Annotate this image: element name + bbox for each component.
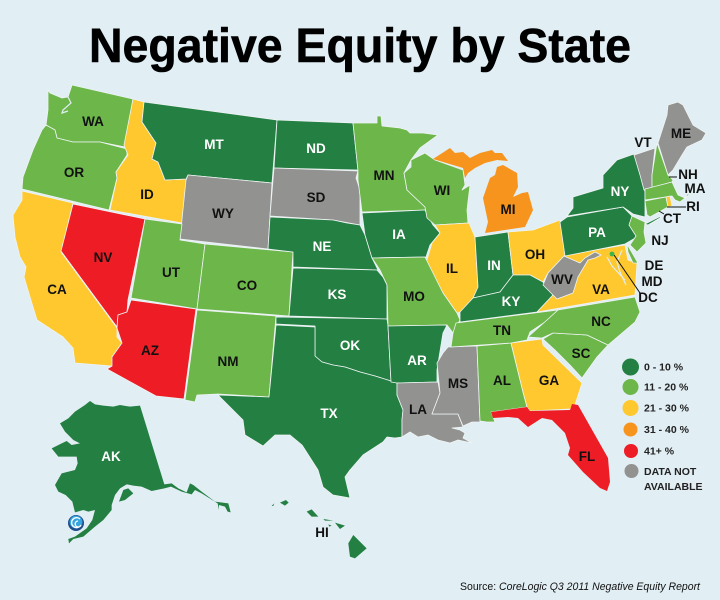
state: CA [13, 191, 122, 366]
state: MO [372, 257, 460, 333]
source note: Source: CoreLogic Q3 2011 Negative Equity Report [460, 581, 701, 593]
state labels: AL [493, 373, 511, 388]
state labels: CO [237, 278, 257, 293]
state: NM [185, 310, 276, 402]
state labels: WY [212, 206, 234, 221]
state labels: PA [588, 225, 606, 240]
state: WV [543, 252, 601, 299]
state labels: WA [82, 114, 104, 129]
state: NE [268, 217, 378, 270]
DC marker [610, 252, 614, 256]
state labels: IA [392, 227, 406, 242]
state labels: IL [446, 261, 458, 276]
title: Negative Equity by State [89, 20, 631, 73]
state: ND [274, 120, 358, 170]
state: TX [218, 325, 403, 498]
state: NH [652, 143, 673, 188]
state labels: CA [47, 282, 67, 297]
state: AK [52, 401, 231, 543]
state: IL [426, 223, 478, 313]
state labels: RI [686, 199, 700, 214]
state: MA [645, 182, 689, 202]
legend: 31-40: 31 - 40 % [644, 424, 690, 436]
state labels: CT [663, 211, 682, 226]
state labels: AR [407, 353, 427, 368]
state labels: DE [645, 258, 663, 273]
legend: 41+: 41+ % [644, 446, 675, 458]
state: NY [567, 154, 661, 225]
state: KS [289, 268, 387, 319]
state: FL [491, 404, 610, 491]
state: UT [131, 219, 205, 309]
state: CT [645, 197, 668, 217]
state labels: SC [572, 346, 591, 361]
state: OK [276, 317, 391, 381]
state: LA [397, 382, 472, 443]
state labels: NY [611, 184, 629, 199]
state labels: NJ [651, 233, 669, 248]
state labels: NM [218, 354, 238, 369]
state labels: NC [591, 314, 611, 329]
state: NJ [629, 216, 646, 252]
state: WA [46, 85, 133, 147]
state: MI [433, 148, 533, 233]
state labels: TN [493, 323, 511, 338]
state: OH [508, 220, 565, 282]
state labels: OR [64, 165, 84, 180]
state labels: LA [409, 402, 427, 417]
state: ID [110, 99, 187, 223]
state labels: NH [678, 167, 698, 182]
state labels: MI [500, 202, 516, 217]
state labels: MA [684, 181, 706, 196]
legend: data not available: DATA NOT [644, 466, 697, 478]
state: PA [560, 207, 637, 256]
state: SD [270, 168, 360, 225]
state: MT [142, 102, 277, 183]
state labels: ME [671, 126, 691, 141]
state labels: DC [638, 290, 658, 305]
state: VA and MD [537, 245, 637, 312]
state labels: ID [140, 187, 154, 202]
legend: 11-20: 11 - 20 % [644, 382, 689, 394]
state: WI [404, 153, 470, 225]
state labels: KY [502, 294, 520, 309]
state: VT [634, 148, 655, 190]
state: HI [272, 500, 367, 558]
state labels: AZ [141, 343, 159, 358]
state: SC [543, 333, 608, 378]
map of US states [13, 85, 706, 558]
legend: data not available: AVAILABLE [644, 481, 703, 493]
state: DE [627, 244, 638, 263]
state: CO [197, 244, 293, 316]
state labels: MN [374, 168, 394, 183]
state: NC [528, 297, 640, 345]
legend: 21-30: 21 - 30 % [644, 402, 690, 414]
state labels: NE [313, 239, 331, 254]
state labels: AK [101, 449, 121, 464]
state labels: MT [204, 137, 224, 152]
water inlets: Puget Sound and Chesapeake Bay [62, 97, 626, 285]
legend [622, 358, 703, 493]
legend: data not available [624, 464, 703, 493]
state: NV [61, 204, 145, 327]
state labels: KS [328, 287, 346, 302]
state labels: WI [434, 183, 450, 198]
state labels: UT [162, 265, 181, 280]
state labels: OH [525, 247, 545, 262]
state labels: FL [579, 449, 595, 464]
state: RI [666, 196, 672, 207]
state labels: TX [320, 406, 338, 421]
state labels: WV [551, 272, 573, 287]
state labels: VT [634, 135, 652, 150]
state: AR [388, 325, 447, 383]
state labels: HI [315, 525, 329, 540]
state labels [47, 114, 706, 540]
state labels: SD [307, 190, 326, 205]
state labels: MO [403, 289, 425, 304]
state: OR [22, 125, 127, 210]
state: AL [477, 343, 527, 422]
state: KY [460, 275, 553, 322]
logo: blue swirl [68, 515, 84, 531]
state labels: OK [340, 338, 360, 353]
state labels: MS [448, 376, 468, 391]
state labels: ND [306, 141, 326, 156]
state: WY [180, 175, 272, 249]
state: IA [362, 210, 440, 258]
legend: 0-10: 0 - 10 % [644, 362, 684, 374]
state: ME [658, 102, 706, 175]
state: TN [451, 310, 558, 347]
state: IN [473, 232, 513, 298]
state: AZ [107, 300, 196, 399]
leader lines for small states [614, 177, 686, 293]
state: GA [511, 339, 582, 411]
state labels: IN [487, 258, 501, 273]
state labels: GA [539, 373, 559, 388]
state labels: MD [642, 274, 663, 289]
state: MS [432, 346, 480, 426]
state labels: NV [94, 250, 112, 265]
state: MN [353, 116, 438, 212]
state labels: VA [592, 282, 610, 297]
